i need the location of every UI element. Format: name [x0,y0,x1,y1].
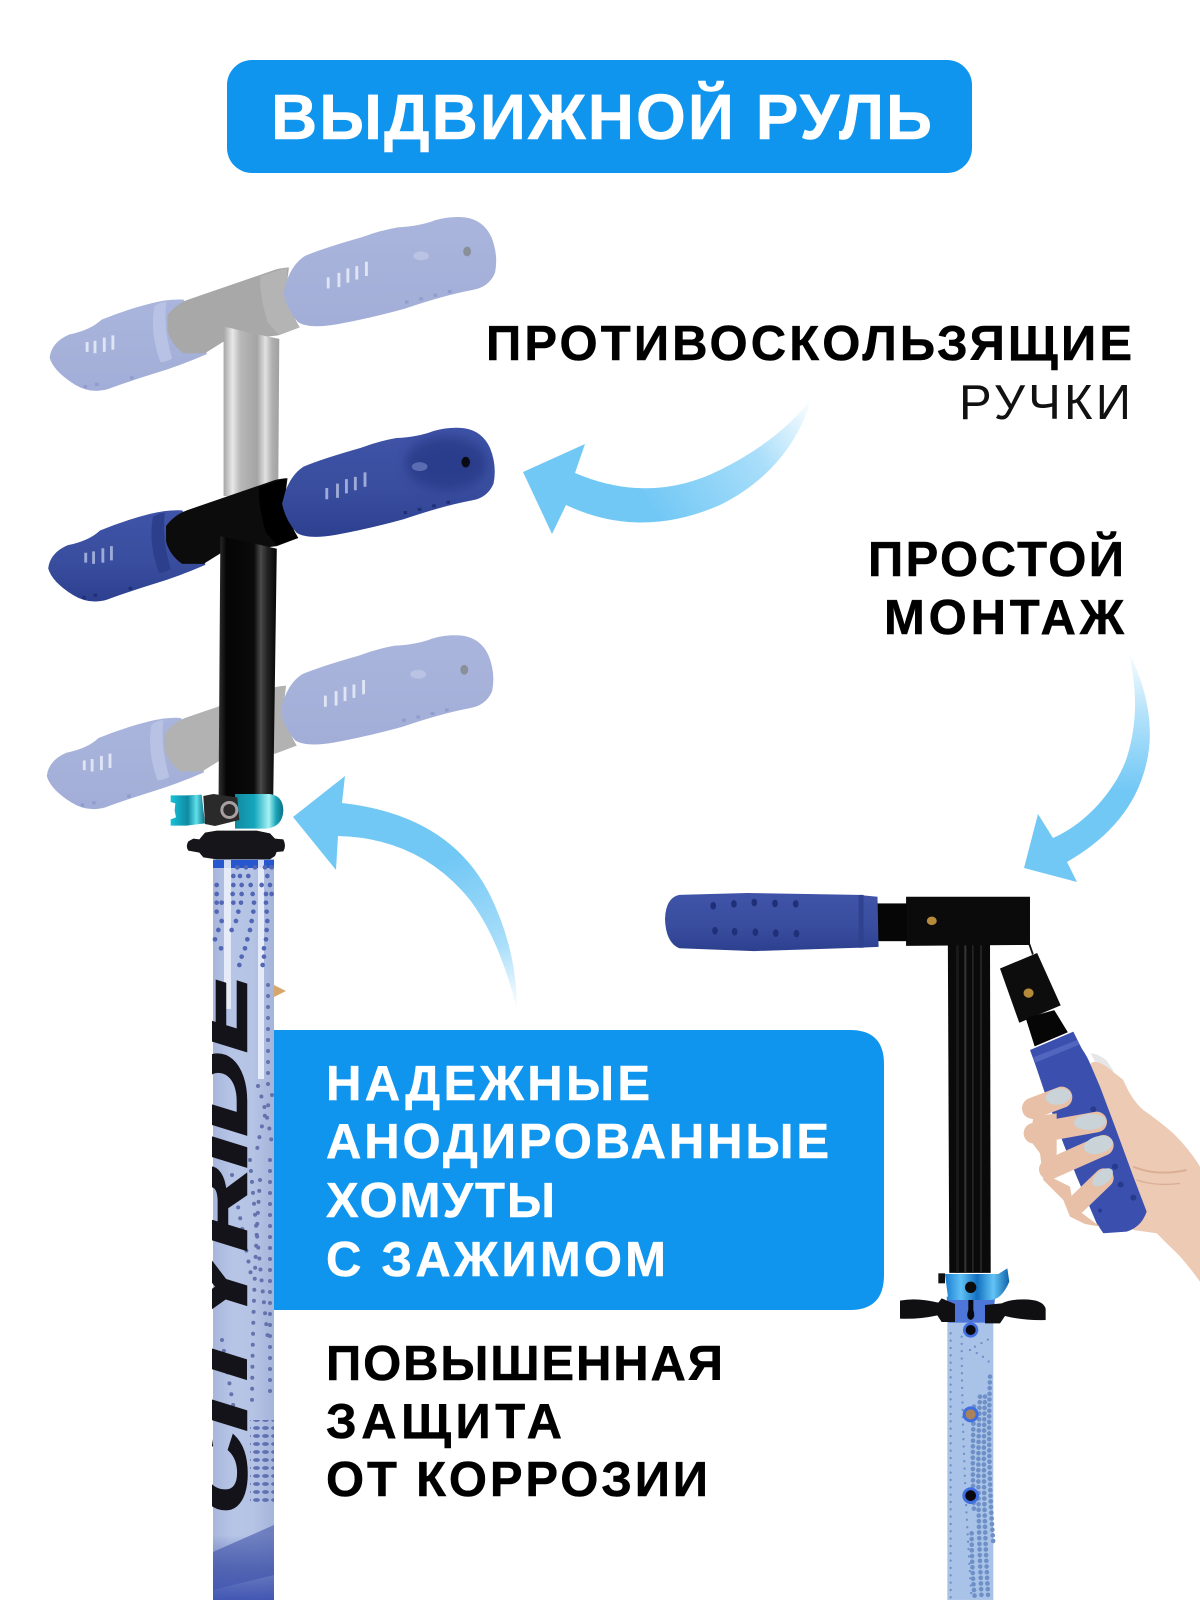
pole [947,1322,993,1600]
callout text: АНОДИРОВАННЫЕ [326,1115,829,1169]
black stem [219,536,277,798]
mount holes [963,1322,978,1338]
brass bolt tip [274,985,286,997]
label: easy assembly [868,532,1125,645]
blue grip [1030,1032,1147,1233]
folded handlebar upper part [665,893,1068,1273]
blue clamp [938,1273,945,1283]
callout panel: clamps [274,1030,884,1310]
label: anti-slip grips: ПРОТИВОСКОЛЬЗЯЩИЕ [486,317,1132,371]
active handlebar with blue grips [48,428,495,602]
lower ghost handlebar [47,635,493,809]
label: anti-slip grips: РУЧКИ [959,376,1131,430]
upper ghost handlebar [50,217,496,496]
label: corrosion protection: ЗАЩИТА [326,1395,562,1449]
stem [948,935,991,1273]
CITYRIDE logo: CITYRIDE [182,972,262,1514]
scooter handlebar: three positions [47,217,496,809]
callout text: НАДЕЖНЫЕ [326,1057,650,1111]
folded scooter pole, clamp and wing nuts [900,1268,1046,1600]
palm [1091,1062,1200,1282]
label: easy assembly: МОНТАЖ [884,591,1125,645]
label: anti-slip grips [486,317,1132,430]
nails [1044,1087,1116,1190]
label: easy assembly: ПРОСТОЙ [868,532,1124,587]
label: corrosion protection: ПОВЫШЕННАЯ [326,1337,723,1391]
top dots [213,865,274,967]
wing nuts [900,1298,955,1322]
hand holding detached grip [1030,1032,1200,1282]
thumb nail [1091,1053,1114,1072]
T-bar [906,897,1030,946]
callout text [326,1057,829,1287]
callout text: ХОМУТЫ [326,1174,555,1228]
cable [1029,944,1033,954]
dotted print [951,1333,993,1600]
arrow to grips [523,398,812,534]
title badge [227,60,972,173]
fingers [1033,1097,1104,1205]
label: corrosion protection [326,1337,723,1507]
arrow to assembly [1024,650,1150,882]
dotted print [222,985,272,1410]
teal clamp and collar nut [171,794,285,859]
detached grip cap [1000,953,1061,1023]
callout text: С ЗАЖИМОМ [326,1233,666,1287]
title text: ВЫДВИЖНОЙ РУЛЬ [271,80,932,153]
blue collar [947,1297,995,1323]
horizontal grip [665,893,879,951]
label: corrosion protection: ОТ КОРРОЗИИ [326,1453,708,1507]
arrow to clamp [293,776,517,1010]
scooter pole with CITYRIDE print [212,859,274,1600]
